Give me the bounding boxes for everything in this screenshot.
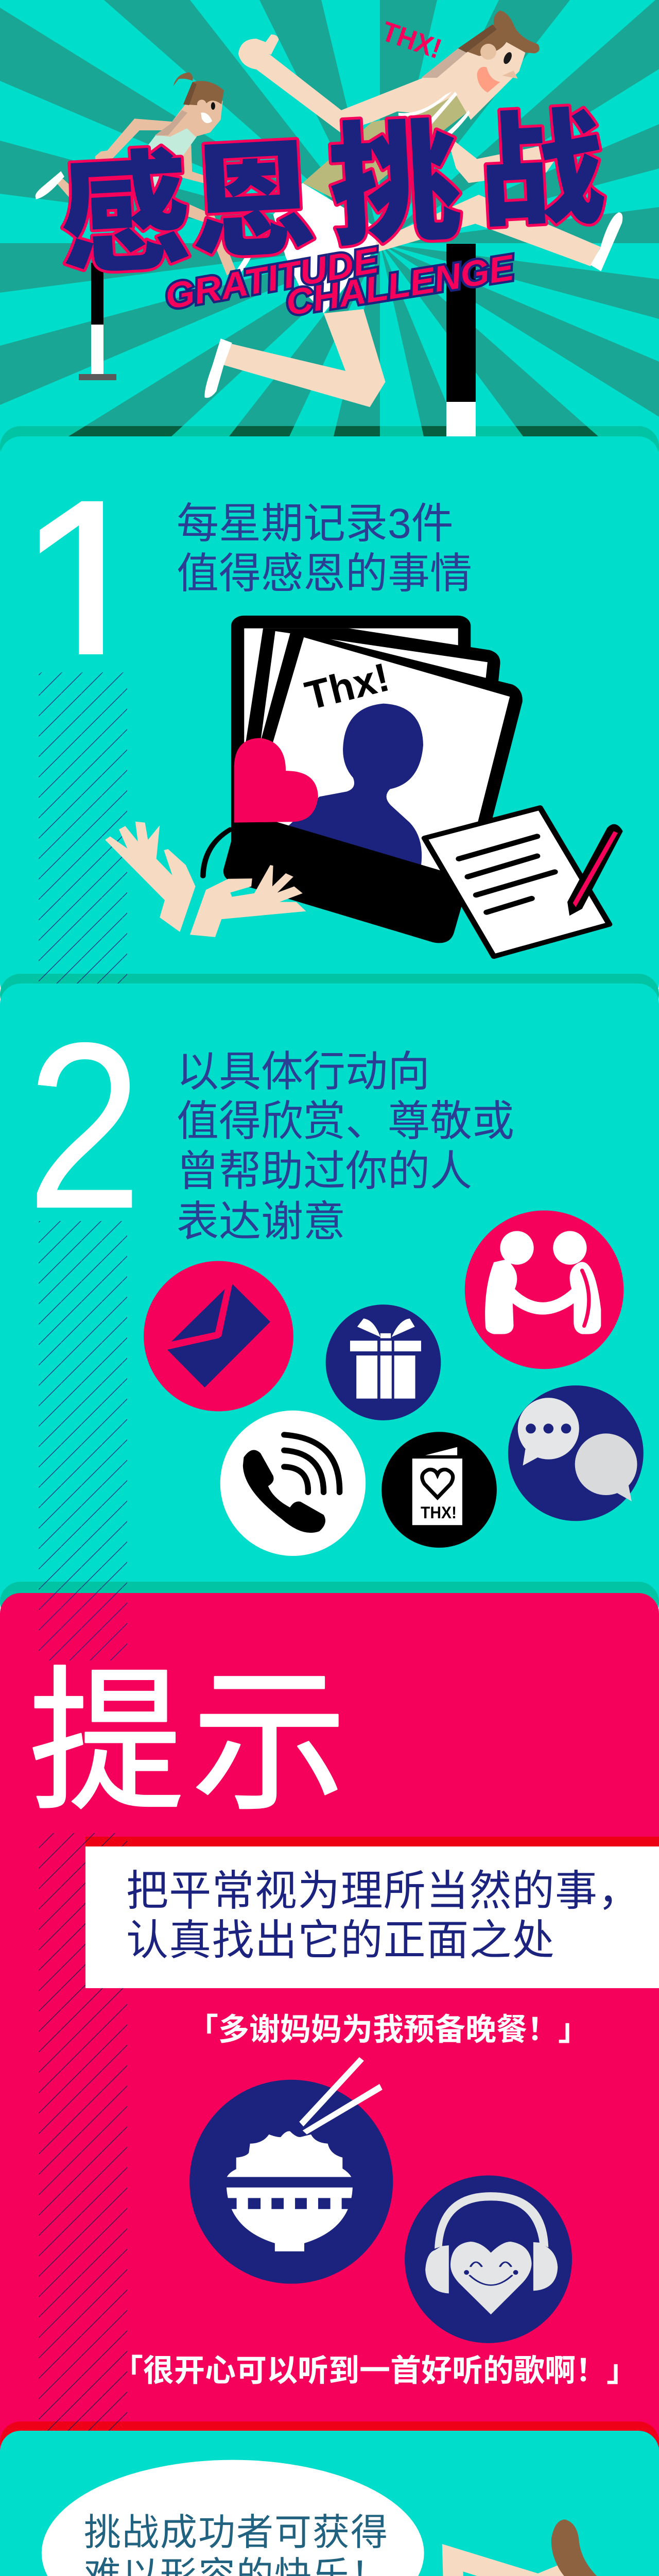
icon: rice bowl — [189, 2057, 393, 2284]
icon: heart with headphones — [405, 2175, 572, 2343]
runner: girl — [36, 72, 253, 278]
icon: gift — [326, 1304, 441, 1420]
title: 感恩挑战: 战 — [475, 97, 608, 244]
numeral 2: 2 — [27, 993, 143, 1258]
panel 4 top band — [0, 2421, 659, 2463]
panel 4: reward — [0, 2431, 659, 2576]
quote 2: 「很开心可以听到一首好听的歌啊！」 — [112, 2353, 637, 2388]
numeral 1: 1 — [16, 447, 157, 730]
Thx! label on card: Thx! — [301, 654, 394, 718]
panel 3 top band — [0, 1582, 659, 1623]
quote 1: 「多谢妈妈为我预备晚餐！」 — [187, 2012, 589, 2047]
red strip above tip box — [85, 1837, 659, 1847]
title: 感恩挑战: 恩 — [187, 130, 318, 275]
thought bubble — [42, 2460, 424, 2576]
illustration: thank-you cards — [105, 616, 623, 956]
step 2 text: 表达谢意 — [177, 1198, 345, 1245]
panel 2: step two — [0, 984, 659, 1622]
hatch strip 1 — [39, 672, 127, 984]
hurdle: small left — [79, 263, 116, 380]
hero background: sunburst — [0, 0, 659, 464]
icon: envelope — [144, 1261, 293, 1411]
tip box: 把平常视为理所当然的事， — [126, 1868, 641, 1914]
hatch strip 2 — [39, 1221, 127, 1660]
panel 1 top band — [0, 426, 659, 452]
icon: handshake — [465, 1211, 623, 1369]
icon: card — [381, 1432, 497, 1548]
icon group: ways to say thanks — [144, 1211, 644, 1556]
step 1 text: 每星期记录3件 — [177, 500, 454, 547]
subtitle: Gratitude Challenge: CHALLENGE — [283, 247, 517, 323]
title: 感恩挑战: 感 — [56, 140, 193, 291]
speech text: 挑战成功者可获得 — [84, 2512, 389, 2553]
step 1 text: 值得感恩的事情 — [177, 550, 472, 597]
hurdle: big right — [446, 244, 476, 438]
step 2 text: 以具体行动向 — [177, 1048, 430, 1095]
subtitle: Gratitude Challenge: GRATITUDE — [162, 240, 383, 317]
heading: 提示: 提示 — [29, 1655, 354, 1829]
step 2 text: 值得欣赏、尊敬或 — [177, 1098, 514, 1145]
card THX! label: THX! — [421, 1503, 457, 1522]
tip box: 认真找出它的正面之处 — [126, 1917, 555, 1964]
icon: phone — [220, 1411, 366, 1556]
panel 1: step one — [0, 436, 659, 1003]
panel 2 top band — [0, 974, 659, 1015]
runner: man — [204, 10, 622, 407]
subtitle: Gratitude Challenge — [162, 240, 517, 323]
THX! shout: THX! — [378, 16, 445, 65]
hatch strip 3 — [39, 1833, 127, 2431]
tip box — [85, 1846, 659, 1988]
panel 3: tips — [0, 1593, 659, 2469]
step 2 text: 曾帮助过你的人 — [177, 1148, 472, 1195]
illustration: relaxed man, bubble, pigeon — [42, 2460, 645, 2576]
man lying down — [43, 2519, 645, 2576]
title: 感恩挑战 — [56, 97, 608, 291]
title: 感恩挑战: 挑 — [325, 108, 464, 262]
icon group: rice and headphones — [189, 2057, 572, 2343]
icon: chat bubbles — [508, 1385, 644, 1521]
